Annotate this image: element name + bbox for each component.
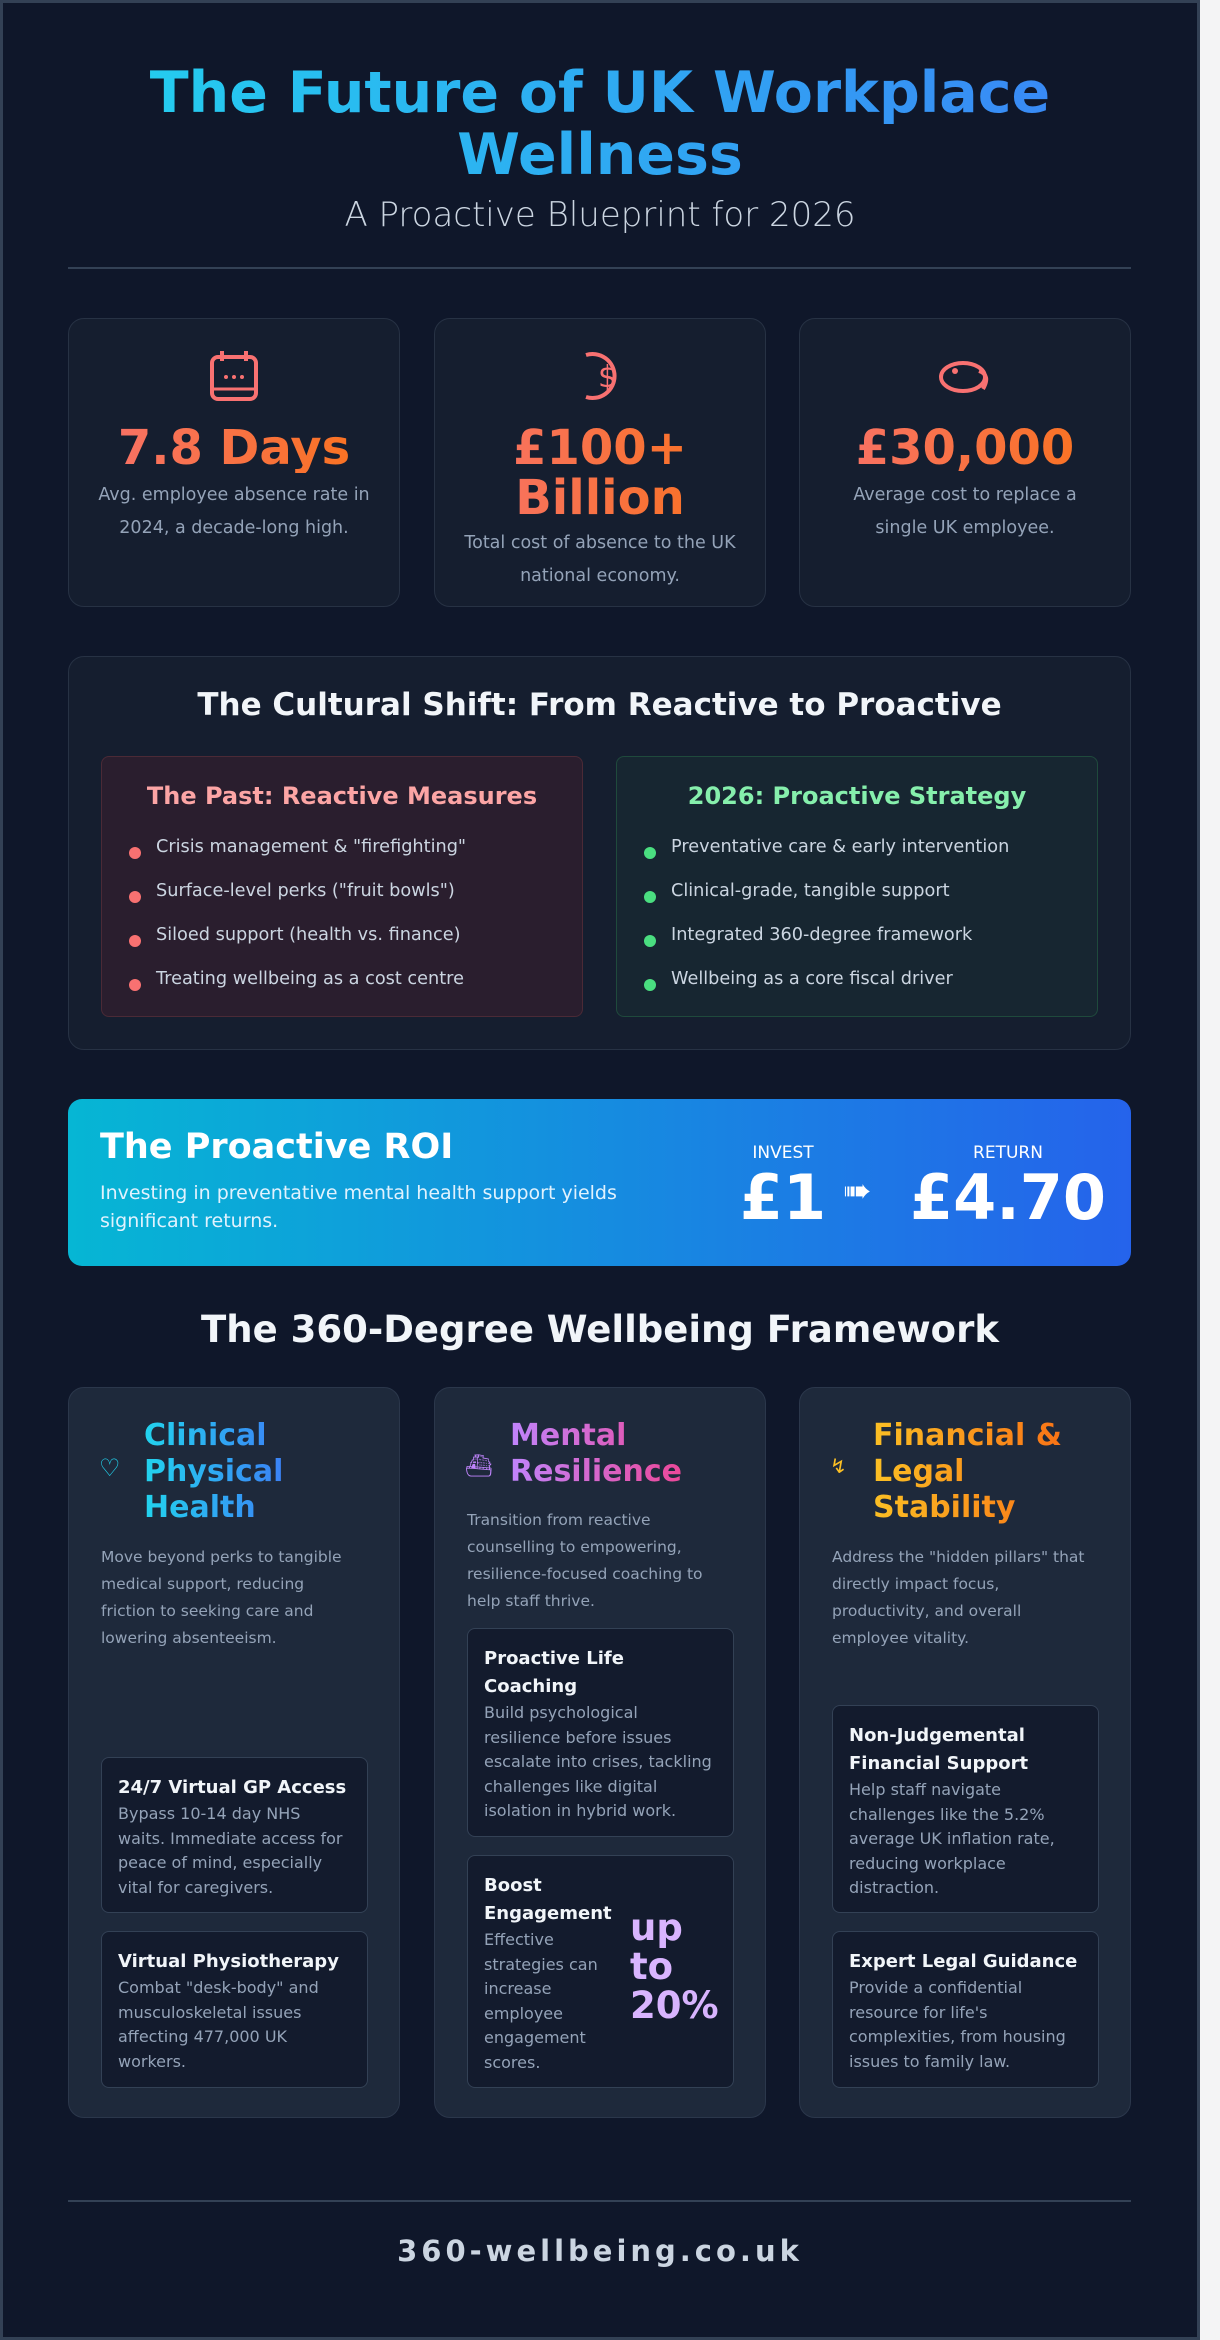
panel: proactive 2026: Integrated 360-degree framework xyxy=(671,925,972,945)
card: mental resilience: ⛴ xyxy=(465,1454,493,1479)
subtitle: A Proactive Blueprint for 2026 xyxy=(344,195,856,235)
card: financial & legal xyxy=(799,1387,1131,2118)
subcard: coaching xyxy=(467,1628,734,1837)
panel: cultural shift xyxy=(68,656,1131,1050)
panel: proactive 2026 xyxy=(616,756,1098,1017)
subcard: financial: Help staff navigate challenges like the 5.2% average UK inflation rate, reducing workplace distraction. xyxy=(849,1780,1055,1897)
ROI heading: The Proactive ROI xyxy=(100,1127,453,1167)
card: clinical physical health: Clinical xyxy=(144,1418,267,1453)
ROI text: Investing in preventative mental health support yields significant returns. xyxy=(100,1182,617,1232)
card: clinical physical health: Physical xyxy=(144,1454,283,1489)
subcard: coaching: Build psychological resilience before issues escalate into crises, tackling challenges like digital isolation in hybrid work. xyxy=(484,1703,712,1820)
card: mental resilience xyxy=(434,1387,766,2118)
subcard: legal: Expert Legal Guidance xyxy=(849,1951,1077,1972)
icon: heart: ♡ xyxy=(99,1454,121,1482)
stat card: cost of absence: Billion xyxy=(515,470,685,526)
subcard: GP: 24/7 Virtual GP Access xyxy=(118,1777,346,1798)
card: clinical physical health: Health xyxy=(144,1490,256,1525)
card: clinical physical health xyxy=(68,1387,400,2118)
card: clinical physical health: Move beyond perks to tangible medical support, reducing friction to seeking care and lowering absenteeism. xyxy=(101,1548,342,1647)
stat card: replacement cost xyxy=(799,318,1131,607)
stat card: replacement cost: £30,000 xyxy=(856,420,1074,476)
subcard: coaching: Proactive Life Coaching xyxy=(484,1648,624,1697)
title: The Future of UK Workplace xyxy=(150,60,1050,126)
stat: up to 20%: to xyxy=(630,1945,673,1988)
panel: past reactive: The Past: Reactive Measures xyxy=(147,782,537,810)
panel: proactive 2026: 2026: Proactive Strategy xyxy=(688,782,1026,810)
icon: calendar xyxy=(210,351,258,401)
subcard: physio: Virtual Physiotherapy xyxy=(118,1951,339,1972)
card: mental resilience: Transition from reactive counselling to empowering, resilience-focused coaching to help staff thrive. xyxy=(467,1511,703,1610)
stat: up to 20% xyxy=(630,1906,719,2027)
panel: proactive 2026: Preventative care & early intervention xyxy=(671,837,1009,857)
stat card: cost of absence: Total cost of absence to the UK xyxy=(464,533,736,553)
icon: money xyxy=(585,352,617,400)
stat card: absence days xyxy=(68,318,400,607)
panel: past reactive: Crisis management & "firefighting" xyxy=(156,837,466,857)
panel: past reactive: Siloed support (health vs. finance) xyxy=(156,925,460,945)
stat card: cost of absence: £100+ xyxy=(513,420,687,476)
stat card: cost of absence: national economy. xyxy=(520,566,680,586)
icon: piggy bank xyxy=(939,361,988,393)
card: financial & legal: Stability xyxy=(873,1490,1015,1525)
subcard: GP xyxy=(101,1757,368,1913)
subcard: GP: Bypass 10-14 day NHS waits. Immediate access for peace of mind, especially vital for caregivers. xyxy=(118,1804,342,1896)
icon: arrow: ➠ xyxy=(843,1171,872,1211)
title xyxy=(40,62,1160,186)
title: Wellness xyxy=(457,122,743,188)
stat: up to 20%: up xyxy=(630,1906,683,1949)
subcard: physio: Combat "desk-body" and musculoskeletal issues affecting 477,000 UK workers. xyxy=(118,1978,319,2070)
panel: past reactive xyxy=(101,756,583,1017)
subcard: legal xyxy=(832,1931,1099,2088)
card: mental resilience: Mental xyxy=(510,1418,626,1453)
invest: INVEST xyxy=(752,1143,814,1163)
card: financial & legal: Address the "hidden pillars" that directly impact focus, productivity, and overall employee vitality. xyxy=(832,1548,1084,1647)
card: mental resilience: Resilience xyxy=(510,1454,682,1489)
description xyxy=(98,485,370,538)
subcard: physio xyxy=(101,1931,368,2088)
number: 7.8 Days xyxy=(118,420,350,476)
panel: proactive 2026: Clinical-grade, tangible support xyxy=(671,881,950,901)
number xyxy=(69,423,399,473)
subcard: financial: Non-Judgemental Financial Support xyxy=(849,1725,1028,1774)
stat card: replacement cost: single UK employee. xyxy=(875,518,1055,538)
subcard: financial xyxy=(832,1705,1099,1913)
stat card: cost of absence xyxy=(434,318,766,607)
return: £4.70 xyxy=(910,1161,1106,1234)
stat: up to 20%: 20% xyxy=(630,1984,719,2027)
description: 2024, a decade-long high. xyxy=(119,518,349,538)
ROI banner xyxy=(68,1099,1131,1266)
panel: proactive 2026: Wellbeing as a core fiscal driver xyxy=(671,969,953,989)
return: RETURN xyxy=(973,1143,1043,1163)
card: financial & legal: ↯ xyxy=(830,1454,847,1478)
subcard: engagement: Boost Engagement xyxy=(484,1875,612,1924)
description: Avg. employee absence rate in xyxy=(98,485,370,505)
subcard: engagement: Effective strategies can increase employee engagement scores. xyxy=(484,1930,598,2072)
heading: The Cultural Shift: From Reactive to Proactive xyxy=(197,687,1002,723)
panel: past reactive: Surface-level perks ("fruit bowls") xyxy=(156,881,455,901)
stat card: replacement cost: Average cost to replace a xyxy=(853,485,1077,505)
invest: £1 xyxy=(740,1161,826,1234)
panel: past reactive: Treating wellbeing as a cost centre xyxy=(156,969,464,989)
footer: 360-wellbeing.co.uk xyxy=(397,2234,803,2268)
subcard: engagement xyxy=(467,1855,734,2088)
framework heading: The 360-Degree Wellbeing Framework xyxy=(201,1308,999,1351)
card: financial & legal: Legal xyxy=(873,1454,964,1489)
card: financial & legal: Financial & xyxy=(873,1418,1062,1453)
icon: money: $ xyxy=(598,360,617,395)
subcard: legal: Provide a confidential resource for life's complexities, from housing issues to family law. xyxy=(849,1978,1066,2070)
